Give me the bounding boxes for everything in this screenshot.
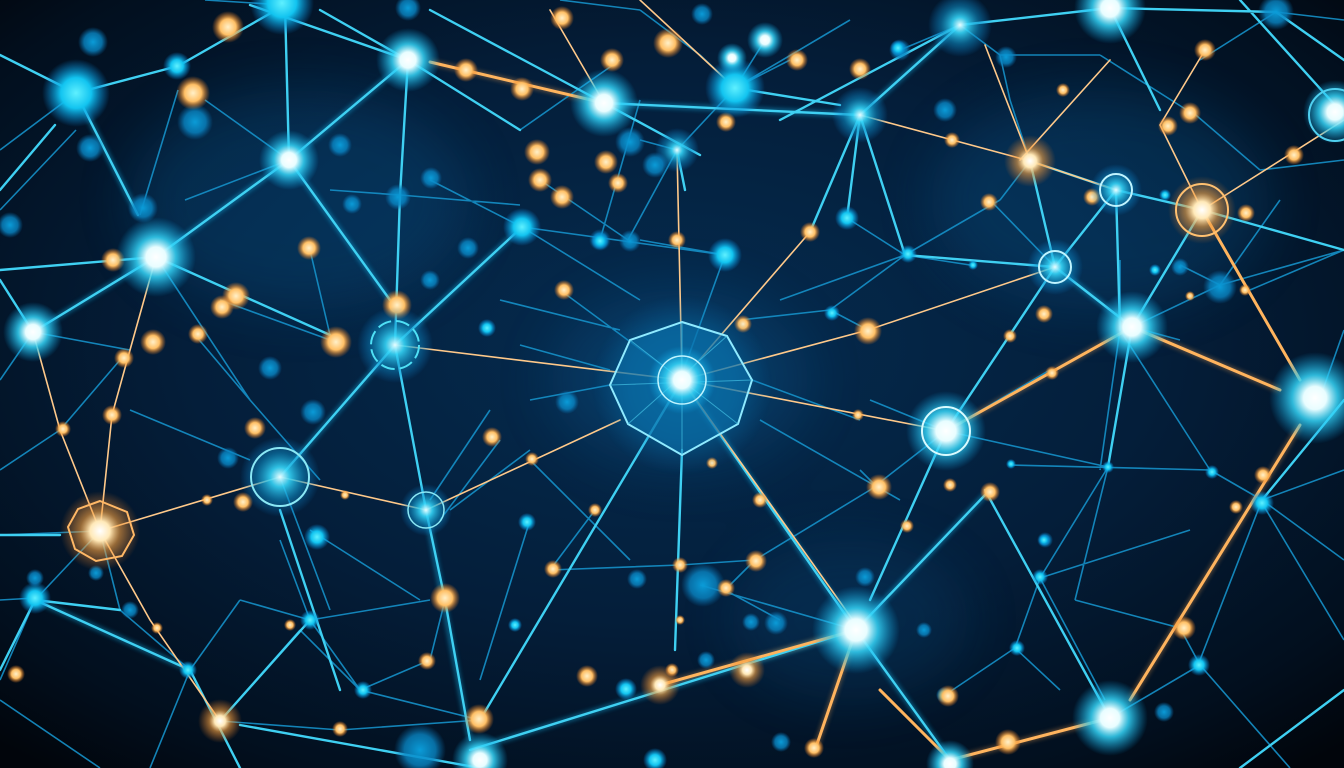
soft link glow <box>33 25 1132 760</box>
nodes: small cyan dots <box>163 40 1219 703</box>
hub: central polygon node <box>592 295 772 475</box>
nodes: large orange glowing nodes <box>60 135 1236 743</box>
background haze <box>130 90 1270 700</box>
